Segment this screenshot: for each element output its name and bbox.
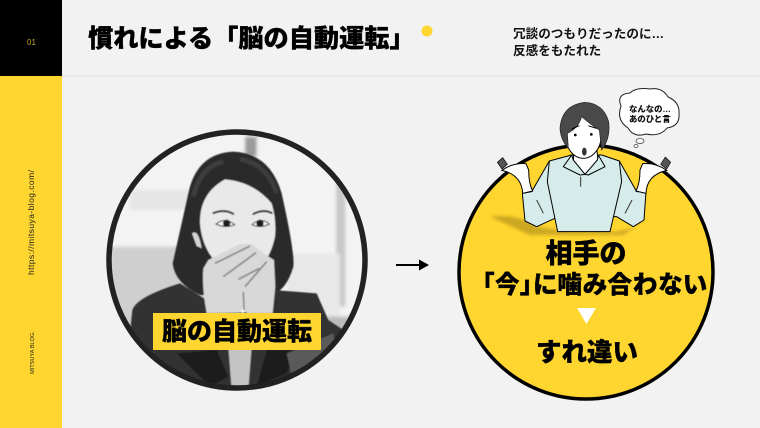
text: miscommunication: すれ違い	[536, 339, 638, 367]
icon: white down triangle	[577, 308, 596, 324]
sidebar: yellow strip: MITSUYA BLOG.	[30, 331, 36, 374]
hair	[173, 152, 294, 295]
thought bubble: なんなの…	[629, 104, 671, 114]
thought bubble: あのひと言	[629, 114, 671, 124]
sidebar: yellow strip	[0, 76, 62, 428]
face	[565, 112, 601, 158]
subtitle	[513, 26, 664, 58]
eyes	[213, 211, 234, 214]
sidebar: page number block: 01	[27, 38, 36, 47]
icon: yellow dot	[422, 26, 432, 36]
torso	[547, 155, 622, 232]
subtitle: 反感をもたれた	[513, 43, 601, 58]
subtitle: 冗談のつもりだったのに…	[513, 26, 664, 41]
thought bubble	[620, 88, 679, 148]
face	[200, 179, 275, 263]
jacket	[130, 283, 353, 397]
hair	[560, 102, 609, 150]
illustration: shrugging man	[490, 102, 671, 235]
arms	[522, 161, 646, 227]
label: brain autopilot	[153, 313, 321, 350]
text: mismatch: 相手の	[546, 239, 626, 269]
sidebar: yellow strip: https://mitsuya-blog.com/	[26, 169, 36, 275]
ring	[109, 132, 365, 388]
sidebar: page number block	[0, 0, 62, 76]
hands	[502, 163, 533, 193]
text: mismatch: 「今」に噛み合わない	[482, 270, 707, 299]
label: brain autopilot: 脳の自動運転	[162, 318, 312, 346]
title: 慣れによる「脳の自動運転」	[88, 25, 415, 53]
panel: yellow circle	[459, 145, 713, 399]
photo: surprised woman in circle	[106, 129, 368, 391]
arrow	[396, 260, 429, 270]
hair highlight	[193, 159, 277, 197]
text: mismatch	[482, 239, 707, 299]
neck & collar	[573, 148, 598, 174]
hands	[203, 244, 275, 313]
shirt	[228, 350, 252, 386]
